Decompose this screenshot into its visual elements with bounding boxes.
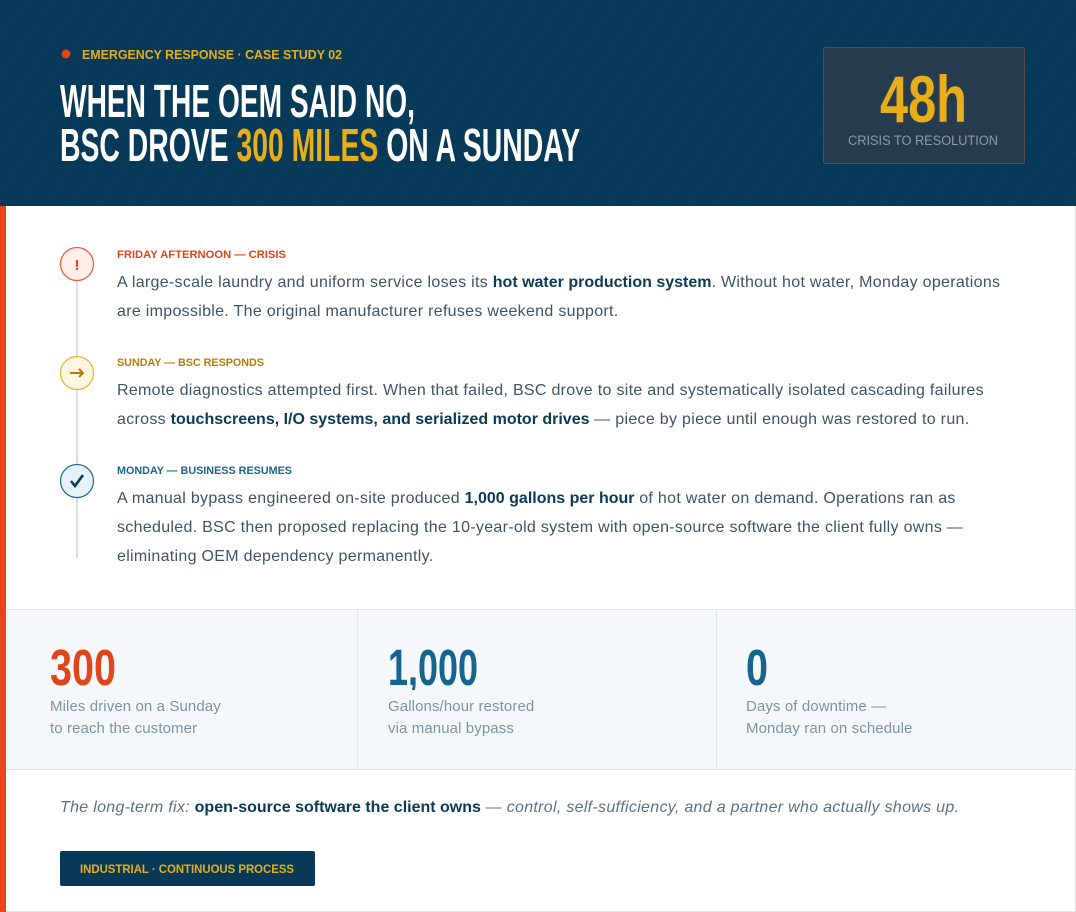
text: via manual bypass	[388, 720, 514, 737]
title: BSC DROVE 300 MILES ON A SUNDAY	[60, 119, 580, 171]
stat box: 48h: 48h	[880, 62, 967, 136]
tag button: INDUSTRIAL · CONTINUOUS PROCESS	[80, 862, 294, 876]
text: Days of downtime —	[746, 698, 886, 715]
timeline	[60, 246, 292, 558]
card border	[0, 206, 1076, 912]
step labels: SUNDAY — BSC RESPONDS	[117, 357, 264, 369]
stat numbers	[50, 639, 768, 690]
step labels: MONDAY — BUSINESS RESUMES	[117, 465, 292, 477]
stat labels: to reach the customer	[50, 720, 197, 737]
step 1 text: are impossible. The original manufacturer refuses weekend support.	[117, 303, 619, 320]
step 1 text: A large-scale laundry and uniform service loses its hot water production system. Without hot water, Monday operations	[117, 274, 1000, 291]
text: Gallons/hour restored	[388, 698, 534, 715]
title: WHEN THE OEM SAID NO,	[60, 75, 415, 127]
eyebrow: EMERGENCY RESPONSE · CASE STUDY 02	[82, 48, 342, 62]
step 2 text	[117, 382, 984, 428]
accent bar	[0, 206, 6, 912]
step 3 text: A manual bypass engineered on-site produced 1,000 gallons per hour of hot water on demand. Operations ran as	[117, 490, 956, 507]
step 1 text	[117, 274, 1000, 320]
step labels: FRIDAY AFTERNOON — CRISIS	[117, 249, 286, 261]
tag button	[60, 851, 315, 886]
stats band	[6, 609, 1075, 770]
step 3 text: eliminating OEM dependency permanently.	[117, 548, 433, 565]
icon: check	[60, 464, 94, 498]
stat labels	[50, 698, 221, 737]
step 3 text	[117, 490, 963, 565]
stat box: 48h: CRISIS TO RESOLUTION	[848, 133, 998, 148]
title	[60, 75, 580, 171]
step labels	[117, 249, 292, 477]
step 2 text: across touchscreens, I/O systems, and serialized motor drives — piece by piece until enough was restored to run.	[117, 411, 969, 428]
step 2 text: Remote diagnostics attempted first. When that failed, BSC drove to site and systematically isolated cascading failures	[117, 382, 984, 399]
icon: crisis: !	[74, 257, 80, 274]
stat labels: Miles driven on a Sunday	[50, 698, 221, 715]
conclusion text: The long-term fix: open-source software the client owns — control, self-sufficiency, and a partner who actually shows up.	[60, 799, 959, 816]
header panel	[0, 0, 1076, 206]
icon: arrow	[60, 356, 94, 390]
step 3 text: scheduled. BSC then proposed replacing the 10-year-old system with open-source software the client fully owns —	[117, 519, 963, 536]
text: Monday ran on schedule	[746, 720, 912, 737]
icon: crisis	[60, 248, 94, 280]
stat box: 48h	[824, 48, 1024, 164]
